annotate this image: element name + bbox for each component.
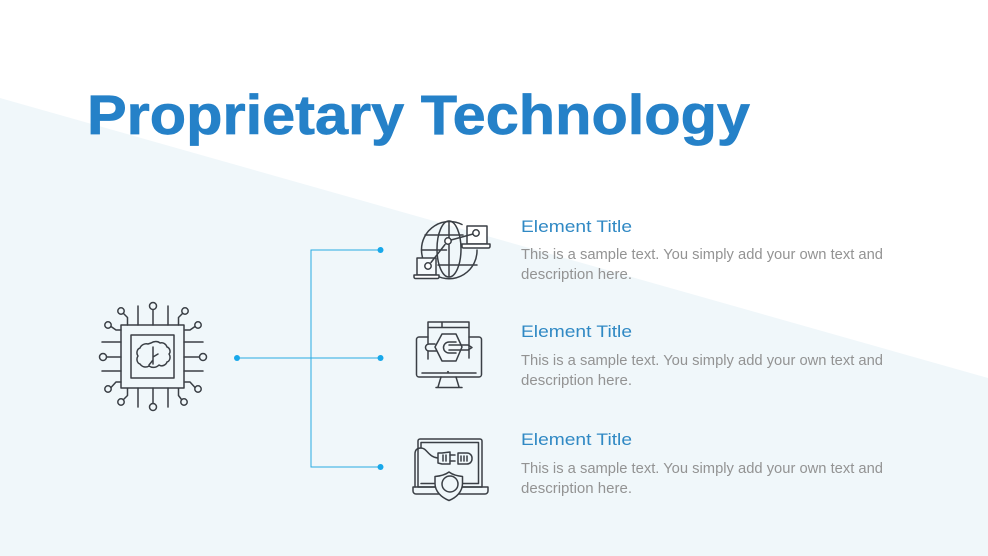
text block: element 1: This is a sample text. You simply add your own text and bbox=[521, 246, 883, 263]
text block: element 2: This is a sample text. You simply add your own text and bbox=[521, 352, 883, 369]
icon: monitor with wrench and pencil bbox=[416, 322, 482, 388]
text block: element 3: description here. bbox=[521, 480, 632, 497]
icon: globe with laptops bbox=[414, 221, 490, 279]
icon: laptop with plug and shield bbox=[413, 439, 488, 500]
text block: element 1: description here. bbox=[521, 266, 632, 283]
text block: element 3: This is a sample text. You simply add your own text and bbox=[521, 460, 883, 477]
text block: element 1 bbox=[521, 218, 883, 283]
text block: element 3: Element Title bbox=[521, 431, 632, 449]
title: Proprietary Technology bbox=[87, 83, 750, 146]
text block: element 3 bbox=[521, 431, 883, 497]
icon: chip with brain bbox=[100, 302, 206, 410]
text block: element 2: description here. bbox=[521, 372, 632, 389]
text block: element 2 bbox=[521, 323, 883, 389]
connector lines bbox=[234, 247, 384, 470]
text block: element 1: Element Title bbox=[521, 218, 632, 236]
text block: element 2: Element Title bbox=[521, 323, 632, 341]
